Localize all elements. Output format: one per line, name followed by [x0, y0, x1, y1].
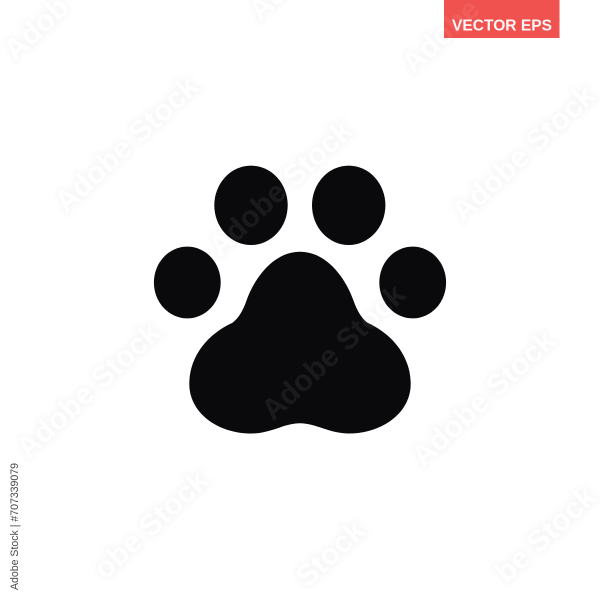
watermark halos: Adobe Stock	[10, 316, 167, 465]
top left toe	[214, 166, 288, 245]
watermark text on white: Ado	[395, 16, 460, 80]
watermark halos: Adobe Stock	[202, 114, 359, 263]
watermark halos: Adobe Stock	[48, 70, 205, 219]
watermark overlay on paw and badge: Adobe Stock	[255, 278, 412, 427]
watermark overlay on paw and badge: Adobe Stock	[202, 114, 359, 263]
stock id caption: Adobe Stock | #707339079	[9, 463, 21, 590]
icon: paw print	[154, 166, 446, 434]
watermark halos: be Stock	[489, 480, 600, 589]
watermark text on white: Adobe Stock	[255, 278, 412, 427]
watermark text on white: Adobe Stock	[405, 324, 562, 473]
watermark halos: obe Stock	[87, 464, 215, 586]
watermark halos: Adobe Stock	[255, 278, 412, 427]
watermark text on white: Adobe Stock	[48, 70, 205, 219]
watermark halos: Ado	[395, 16, 460, 80]
badge: vector eps	[444, 0, 560, 38]
watermark text on white: Adobe Stock	[445, 79, 600, 228]
watermark text on white: Stock	[290, 514, 372, 594]
watermark halos: Adobe Stock	[445, 79, 600, 228]
watermark halos: Adobe Stock	[405, 324, 562, 473]
top right toe	[312, 166, 385, 245]
watermark halos: Stock	[290, 514, 372, 594]
watermark text on white: Adobe Stock	[202, 114, 359, 263]
watermark text on white: Adobe Stock	[10, 316, 167, 465]
watermark text on white: be Stock	[489, 480, 600, 589]
main pad	[189, 252, 411, 434]
left toe	[154, 247, 221, 318]
right toe	[379, 247, 446, 318]
watermark overlay on paw and badge	[202, 0, 486, 427]
badge label: VECTOR EPS	[452, 18, 552, 34]
watermark text on white: obe Stock	[87, 464, 215, 586]
